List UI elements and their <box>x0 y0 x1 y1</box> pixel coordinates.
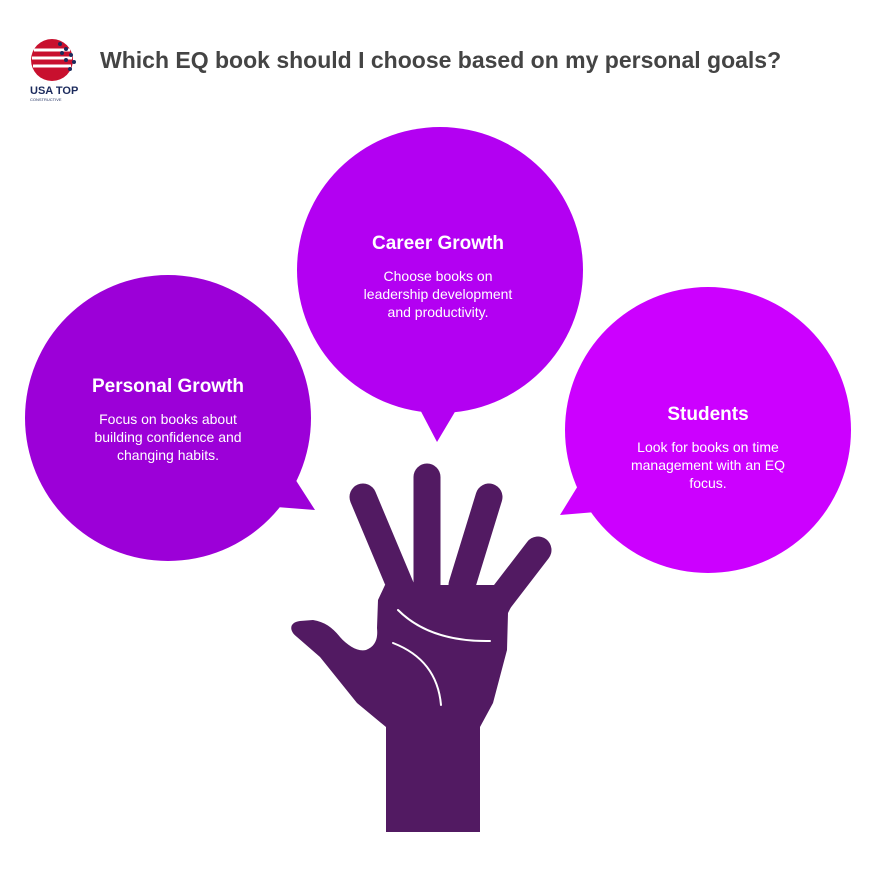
hand <box>291 477 538 832</box>
text: career growth <box>364 233 512 320</box>
title: Which EQ book should I choose based on my personal goals? <box>100 47 781 73</box>
bubble: personal growth <box>25 275 315 561</box>
logo <box>30 39 78 102</box>
bubble: career growth <box>297 127 583 442</box>
text: personal growth: Focus on books about building confidence and changing habits. <box>94 411 242 463</box>
text: students: Look for books on time management with an EQ focus. <box>631 439 785 491</box>
text: students: Students <box>667 404 749 425</box>
text: personal growth <box>92 376 244 463</box>
text: career growth: Career Growth <box>372 233 504 254</box>
text: students <box>631 404 785 491</box>
text: personal growth: Personal Growth <box>92 376 244 397</box>
bubble: students <box>560 287 851 573</box>
logo: USA TOP <box>30 85 78 97</box>
text: career growth: Choose books on leadership development and productivity. <box>364 268 512 320</box>
logo: CONSTRUCTIVE <box>30 97 62 102</box>
